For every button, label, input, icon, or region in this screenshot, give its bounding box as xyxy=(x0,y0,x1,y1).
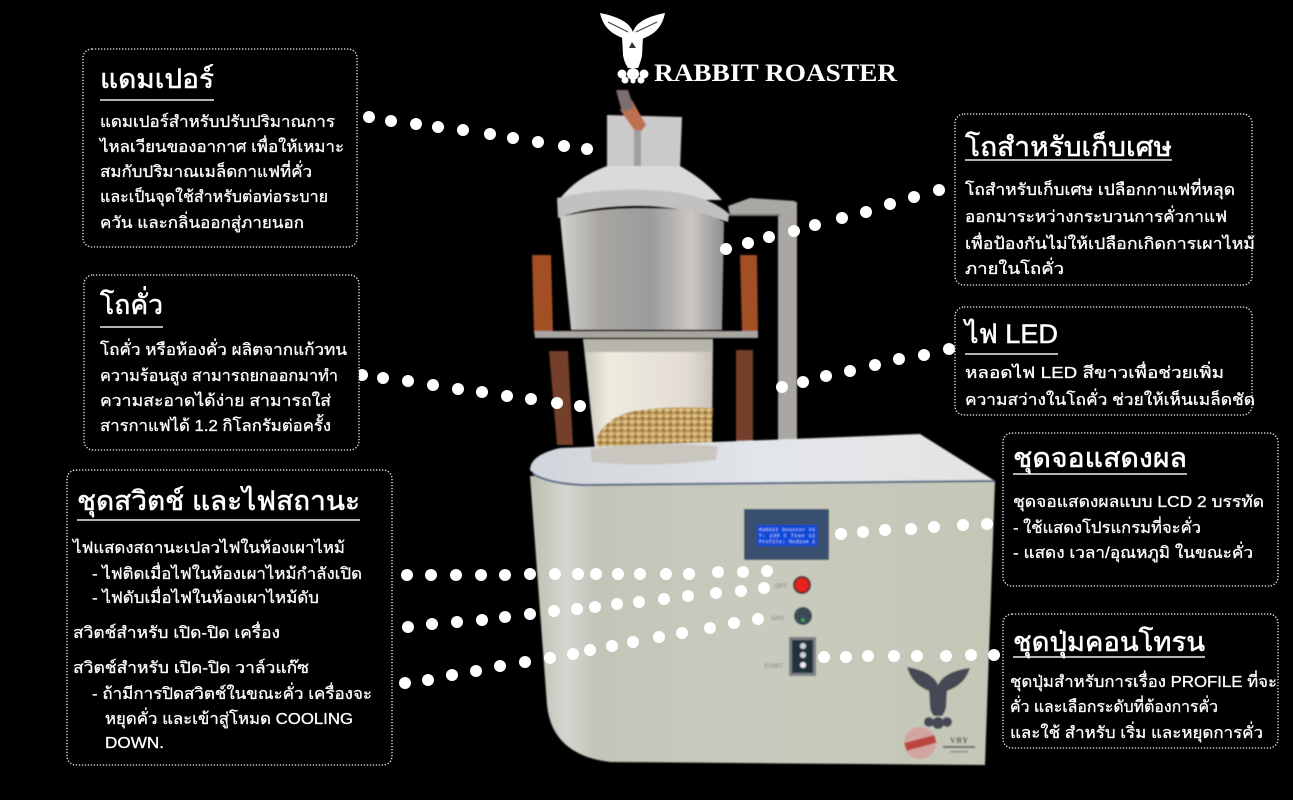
damper description xyxy=(98,112,344,233)
hood cone and lid xyxy=(557,166,729,222)
switches description: - ไฟติดเมื่อไฟในห้องเผาไหม้กำลังเปิด xyxy=(92,562,362,583)
panel: roasting chamber xyxy=(84,275,359,450)
gas switch: GAS xyxy=(771,616,784,622)
panel: damper xyxy=(83,49,357,247)
dotted leader: display xyxy=(835,518,993,540)
patented stamp xyxy=(904,727,936,759)
LED description: หลอดไฟ LED สีขาวเพื่อช่วยเพิ่ม xyxy=(965,361,1224,382)
roasting chamber description: ความร้อนสูง สามารถยกออกมาทำ xyxy=(100,367,338,386)
LCD display xyxy=(744,509,829,560)
heading: roasting chamber: โถคั่ว xyxy=(100,286,163,320)
vertical support arm xyxy=(728,198,820,458)
dotted leader: LED xyxy=(776,343,955,393)
chamber upper band xyxy=(583,339,713,352)
panel: control buttons xyxy=(1003,614,1278,748)
dotted leader: status light xyxy=(401,565,773,581)
roaster machine photo xyxy=(530,90,995,765)
chaff collector description: เพื่อป้องกันไม่ให้เปลือกเกิดการเผาไหม้ xyxy=(965,232,1255,253)
LCD display: Rabbit Roaster V1 xyxy=(759,527,815,533)
switches description: DOWN. xyxy=(105,735,164,752)
panel: LED light xyxy=(955,307,1255,415)
damper chimney xyxy=(607,90,682,190)
machine logo xyxy=(907,667,970,729)
switches description: - ถ้ามีการปิดสวิตช์ในขณะคั่ว เครื่องจะ xyxy=(92,682,372,703)
mounting plate xyxy=(534,331,758,338)
LED description xyxy=(965,361,1255,409)
display description: - ใช้แสดงโปรแกรมที่จะคั่ว xyxy=(1013,516,1201,537)
display description: ชุดจอแสดงผลแบบ LCD 2 บรรทัด xyxy=(1013,494,1264,512)
glass roasting chamber xyxy=(583,339,713,450)
LCD display: Profile: Medium 1 xyxy=(759,539,815,545)
VBY mark xyxy=(943,736,975,752)
dotted leader: control buttons xyxy=(818,649,1000,663)
heading: control buttons: ชุดปุ่มคอนโทรน xyxy=(1013,627,1205,659)
roasting chamber description: สารกาแฟได้ 1.2 กิโลกรัมต่อครั้ง xyxy=(100,414,331,435)
display description: - แสดง เวลา/อุณหภูมิ ในขณะคั่ว xyxy=(1013,541,1253,563)
red power button xyxy=(775,576,811,594)
dotted leader: hopper xyxy=(356,369,586,412)
heading: display: ชุดจอแสดงผล xyxy=(1013,443,1187,475)
switches description: ไฟแสดงสถานะเปลวไฟในห้องเผาไหม้ xyxy=(71,538,345,557)
switches description xyxy=(71,538,372,752)
logo: rabbit roaster xyxy=(600,13,898,87)
chaff collector description: ภายในโถคั่ว xyxy=(965,257,1064,278)
dotted leader: power switch xyxy=(402,582,770,633)
switches description: หยุดคั่ว และเข้าสู่โหมด COOLING xyxy=(105,707,353,729)
LED description: ความสว่างในโถคั่ว ช่วยให้เห็นเมล็ดชัด xyxy=(965,388,1255,409)
top plate xyxy=(530,434,995,484)
damper description: สมกับปริมาณเมล็ดกาแฟที่คั่ว xyxy=(100,160,312,181)
control buttons panel xyxy=(764,637,816,676)
panel: switches and status light xyxy=(67,470,392,765)
dotted leader: damper xyxy=(363,111,593,155)
heading: chaff collector: โถสำหรับเก็บเศษ xyxy=(965,129,1172,162)
dotted leader: gas switch xyxy=(399,613,764,689)
roasting chamber description: โถคั่ว หรือห้องคั่ว ผลิตจากแก้วทน xyxy=(100,338,347,359)
display description xyxy=(1013,494,1264,563)
heading: damper: แดมเปอร์ xyxy=(100,63,214,94)
damper description: และเป็นจุดใช้สำหรับต่อท่อระบาย xyxy=(100,186,328,207)
roasting chamber description: ความสะอาดได้ง่าย สามารถใส่ xyxy=(100,391,331,410)
switches description: สวิตช์สำหรับ เปิด-ปิด เครื่อง xyxy=(73,621,280,642)
coffee beans xyxy=(596,407,713,452)
control buttons description xyxy=(1010,670,1277,743)
LCD display: T: 230 C Time 12 xyxy=(759,533,815,539)
switches description: - ไฟดับเมื่อไฟในห้องเผาไหม้ดับ xyxy=(92,586,319,607)
lower rods xyxy=(549,350,753,445)
panel: LCD display xyxy=(1003,433,1278,586)
switches description: สวิตช์สำหรับ เปิด-ปิด วาล์วแก๊ซ xyxy=(73,658,309,677)
wooden handles xyxy=(532,255,758,333)
damper description: ควัน และกลิ่นออกสู่ภายนอก xyxy=(100,211,304,233)
chaff collector description: ออกมาระหว่างกระบวนการคั่วกาแฟ xyxy=(965,205,1227,226)
chaff collector description: โถสำหรับเก็บเศษ เปลือกกาแฟที่หลุด xyxy=(965,178,1235,200)
damper description: ไหลเวียนของอากาศ เพื่อให้เหมาะ xyxy=(98,135,344,156)
panel: chaff collector xyxy=(955,114,1255,285)
brand name: RABBIT ROASTER xyxy=(654,60,898,87)
VBY mark: VBY xyxy=(950,736,968,745)
heading: switches: ชุดสวิตช์ และไฟสถานะ xyxy=(77,485,360,518)
icon: rabbit head xyxy=(600,13,665,84)
roasting chamber description xyxy=(100,338,347,435)
control buttons panel: START xyxy=(764,664,783,670)
control buttons description: คั่ว และเลือกระดับที่ต้องการคั่ว xyxy=(1010,695,1218,716)
chaff collector cylinder xyxy=(560,208,724,330)
blue top edge xyxy=(533,474,995,485)
heading: LED light: ไฟ LED xyxy=(963,319,1058,349)
damper description: แดมเปอร์สำหรับปรับปริมาณการ xyxy=(100,112,335,131)
control buttons description: ชุดปุ่มสำหรับการเรื่อง PROFILE ที่จะ xyxy=(1010,670,1277,692)
red power button: OFF xyxy=(775,584,787,590)
chamber ring xyxy=(590,444,718,465)
chaff collector description xyxy=(965,178,1255,278)
gas switch xyxy=(771,607,812,625)
control buttons description: และใช้ สำหรับ เริ่ม และหยุดการคั่ว xyxy=(1010,721,1263,743)
base body xyxy=(530,476,995,765)
dotted leader: chaff collector xyxy=(720,184,945,255)
